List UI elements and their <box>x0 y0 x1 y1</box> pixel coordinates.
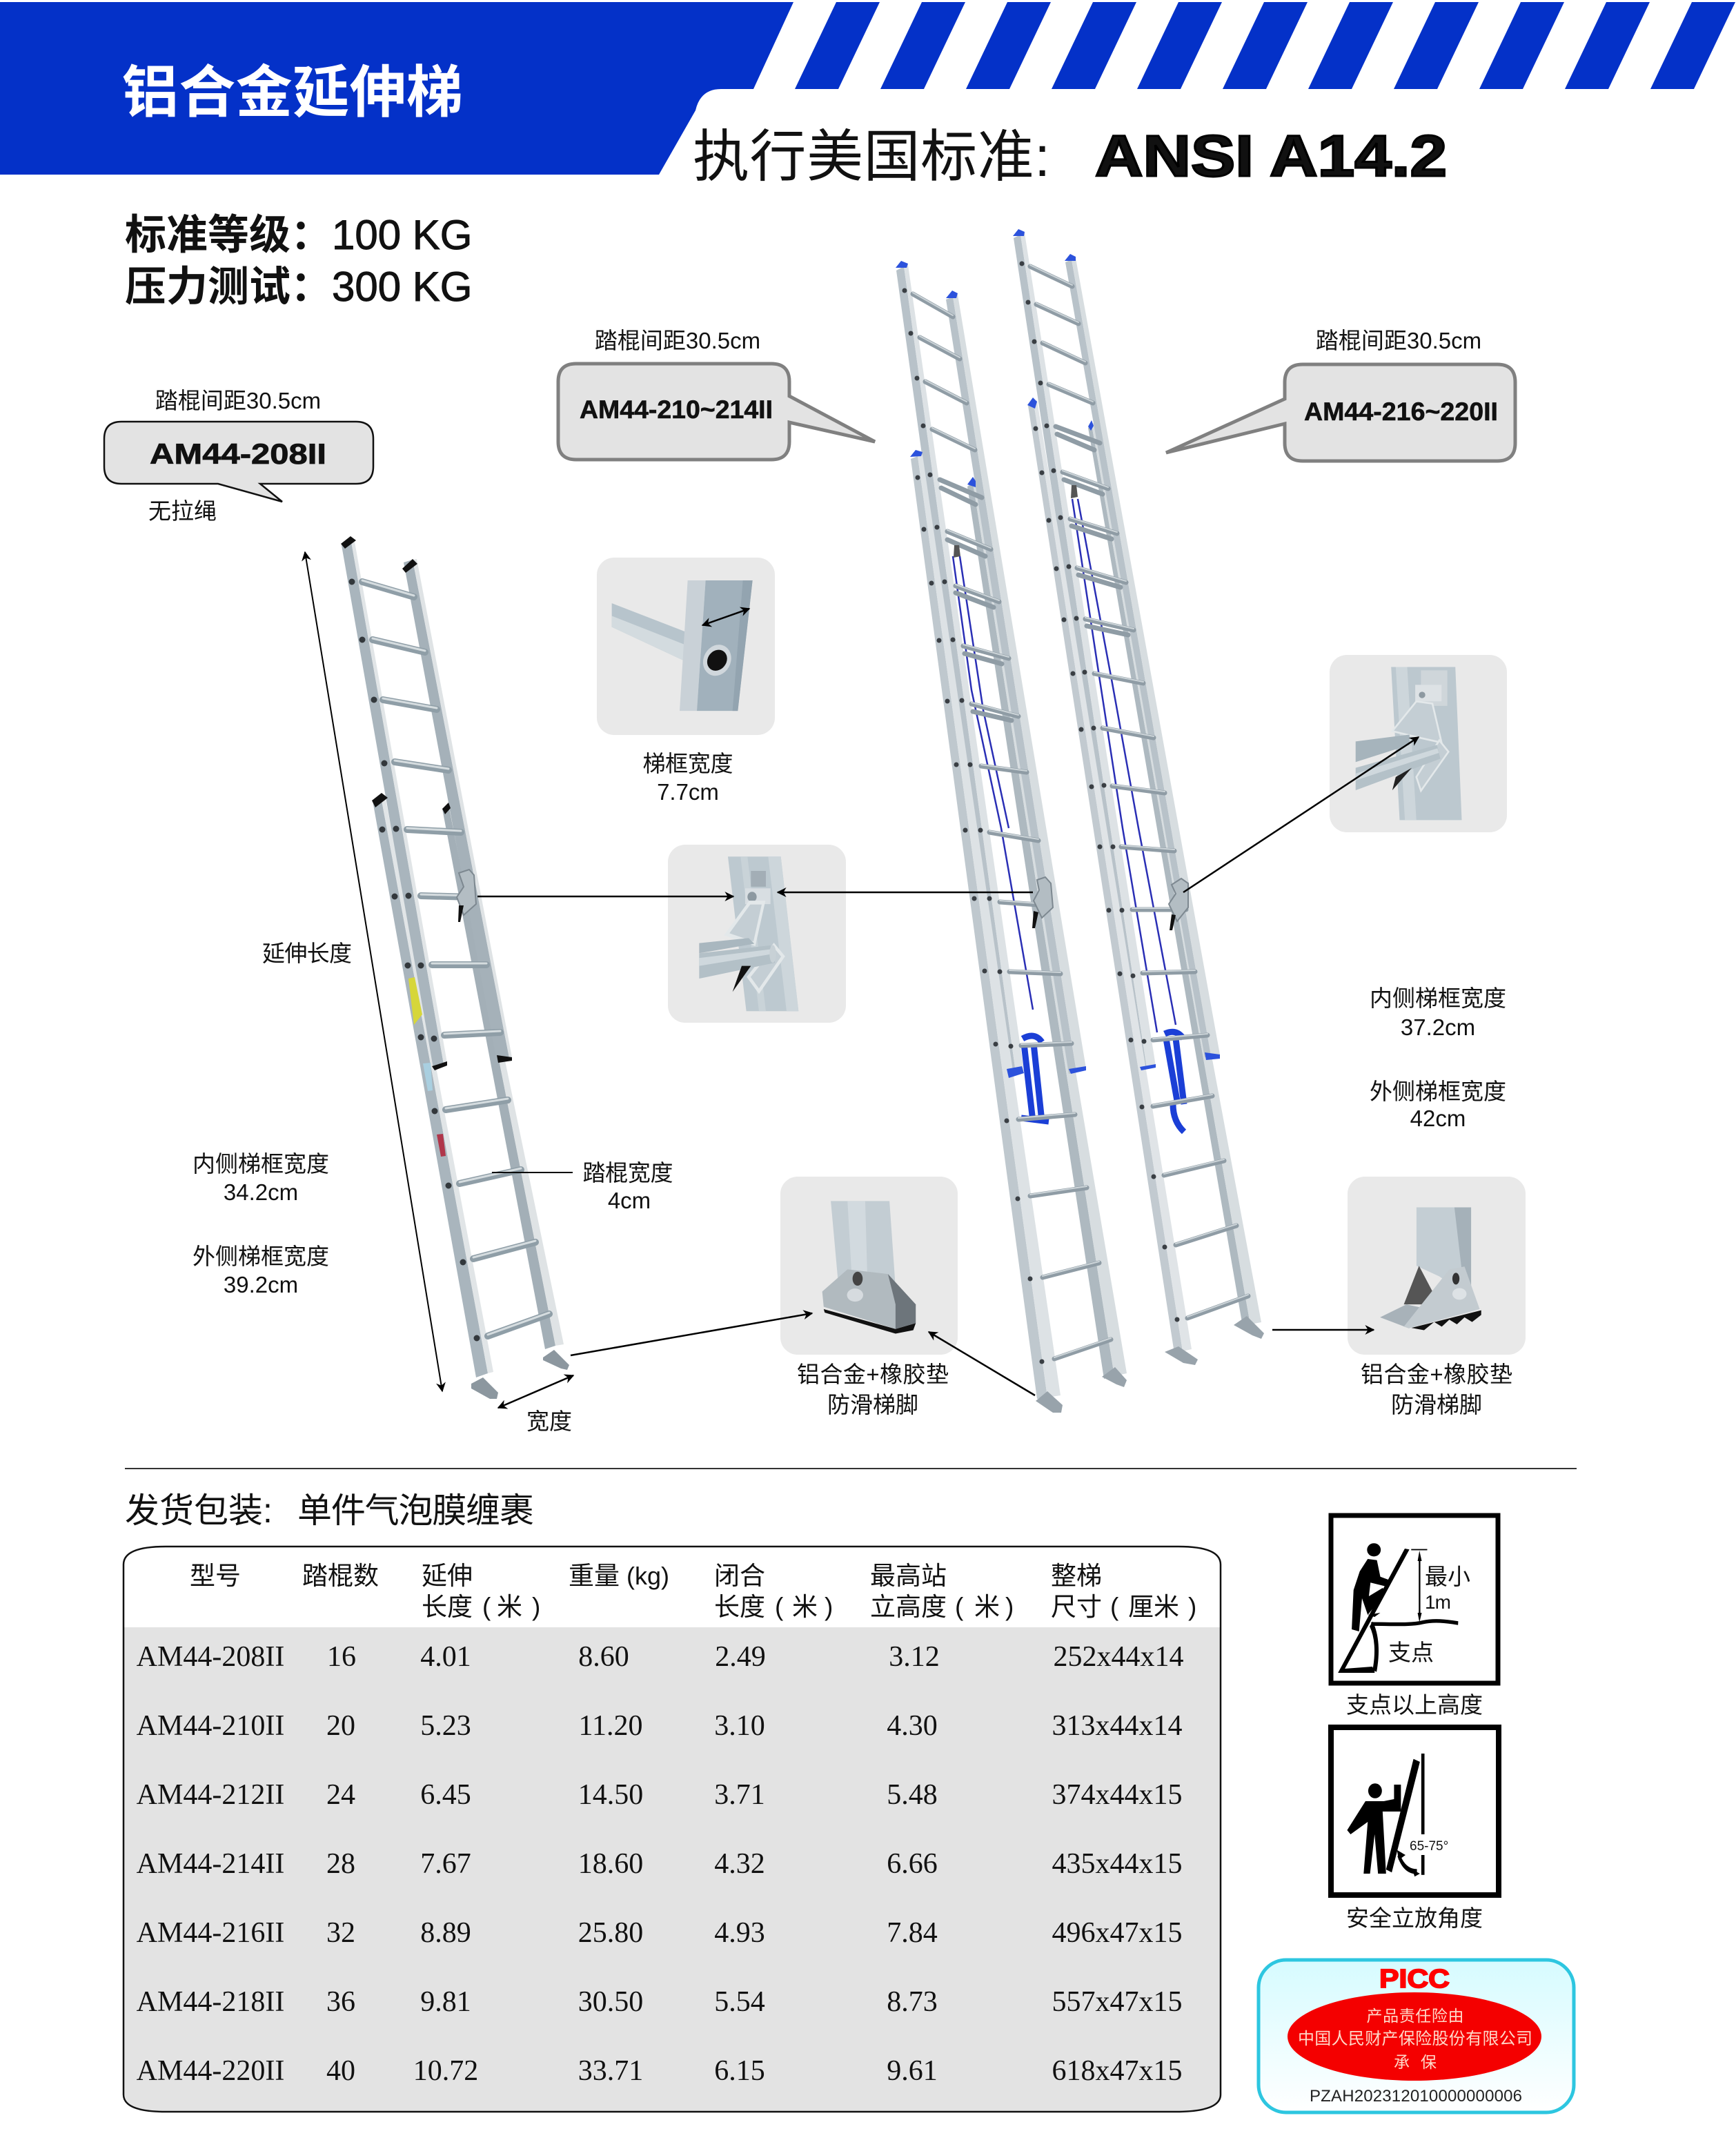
arrow: left ladder foot to photo <box>571 1313 812 1355</box>
table row: AM44-214II: 28 <box>326 1848 355 1880</box>
load rating text: 300 KG <box>332 264 472 310</box>
table header: ) <box>825 1593 833 1621</box>
caption: height above support: 支点以上高度 <box>1346 1692 1483 1718</box>
label: left frame widths <box>193 1151 329 1297</box>
icon: height above support: 最小 <box>1425 1564 1470 1589</box>
table row: AM44-214II: AM44-214II <box>137 1848 284 1880</box>
bolt holes <box>352 582 477 1338</box>
table row: AM44-212II: 374x44x15 <box>1052 1779 1183 1811</box>
caption: left foot: 铝合金+橡胶垫 <box>797 1362 949 1387</box>
table row: AM44-214II: 435x44x15 <box>1052 1848 1183 1880</box>
table row: AM44-220II: AM44-220II <box>137 2055 284 2087</box>
label: rung width with leader <box>492 1160 673 1213</box>
rung lock <box>457 870 476 915</box>
text: rail width: 梯框宽度 <box>643 751 733 776</box>
table row: AM44-216II: 25.80 <box>578 1917 643 1949</box>
label: rung width with leader: 踏棍宽度 <box>582 1160 673 1186</box>
table header: 厘米 <box>1128 1593 1179 1621</box>
spec table <box>124 1547 1221 2112</box>
base section rails <box>442 805 555 1349</box>
table row: AM44-218II: 9.81 <box>420 1986 471 2018</box>
table row: AM44-210II: 20 <box>326 1710 355 1742</box>
table row: AM44-210II: 5.23 <box>420 1710 471 1742</box>
table row: AM44-218II: 30.50 <box>578 1986 643 2018</box>
blue caps and fly feet <box>896 261 1086 1078</box>
standard heading: 执行美国标准: <box>693 126 1050 188</box>
label: width with arrow: 宽度 <box>526 1409 572 1434</box>
label: rung width with leader: 4cm <box>608 1188 651 1213</box>
blue caps and fly feet <box>1013 229 1220 1070</box>
table row: AM44-210II: 313x44x14 <box>1052 1710 1183 1742</box>
table row: AM44-220II: 10.72 <box>413 2055 478 2087</box>
rope straps <box>1165 1032 1184 1132</box>
table row: AM44-220II: 33.71 <box>578 2055 643 2087</box>
table row: AM44-208II: 2.49 <box>715 1641 766 1673</box>
rungs <box>1030 266 1248 1318</box>
label: right frame widths: 内侧梯框宽度 <box>1370 985 1506 1011</box>
caption: left foot <box>797 1362 949 1417</box>
label: right frame widths: 外侧梯框宽度 <box>1370 1079 1506 1104</box>
badge: PICC insurance: PICC <box>1379 1965 1450 1994</box>
table row: AM44-220II: 618x47x15 <box>1052 2055 1183 2087</box>
table row: AM44-208II: 252x44x14 <box>1053 1641 1184 1673</box>
caption: safe angle: 安全立放角度 <box>1346 1905 1483 1931</box>
table row: AM44-212II <box>137 1779 1183 1811</box>
fly section rails <box>404 560 509 1061</box>
labels on rail <box>408 977 422 1025</box>
arrow: lock from middle ladder <box>778 892 1033 893</box>
table header: ) <box>532 1593 540 1621</box>
table header: 长度 <box>714 1593 765 1621</box>
table row: AM44-210II: 3.10 <box>714 1710 765 1742</box>
arrow: middle ladder foot to photo <box>929 1332 1035 1395</box>
caption: left foot: 防滑梯脚 <box>827 1392 918 1417</box>
ladder: AM44-216~220II <box>1013 229 1264 1365</box>
table row: AM44-214II: 6.66 <box>887 1848 938 1880</box>
arrow: lock from left ladder <box>477 896 733 897</box>
table header: 型号 <box>190 1562 241 1590</box>
rungs <box>362 582 549 1336</box>
table row: AM44-208II <box>137 1641 1184 1673</box>
label: right frame widths: 42cm <box>1410 1106 1466 1131</box>
table row: AM44-210II: 11.20 <box>579 1710 642 1742</box>
table row: AM44-214II: 7.67 <box>420 1848 471 1880</box>
rails <box>1088 424 1250 1326</box>
table row: AM44-212II: 14.50 <box>578 1779 643 1811</box>
table header: 延伸 <box>422 1562 473 1590</box>
table row: AM44-216II: 7.84 <box>887 1917 938 1949</box>
icon: height above support <box>1331 1515 1498 1683</box>
table row: AM44-220II: 40 <box>326 2055 355 2087</box>
callout: AM44-216~220II: 踏棍间距30.5cm <box>1316 328 1481 353</box>
label: left frame widths: 内侧梯框宽度 <box>193 1151 329 1177</box>
arrow: right ladder foot to photo <box>1272 1329 1374 1331</box>
title: 铝合金延伸梯 <box>122 61 463 124</box>
callout: AM44-210~214II: 踏棍间距30.5cm <box>595 328 760 353</box>
packaging heading: 单件气泡膜缠裹 <box>297 1491 534 1530</box>
callout: AM44-208II: 踏棍间距30.5cm <box>155 388 321 413</box>
rails <box>967 483 1114 1379</box>
icon: safe standing angle <box>1331 1727 1499 1895</box>
table header: 闭合 <box>714 1562 765 1590</box>
table row: AM44-220II: 9.61 <box>887 2055 938 2087</box>
table row: AM44-212II: 6.45 <box>420 1779 471 1811</box>
standard code: ANSI A14.2 <box>1095 124 1447 188</box>
table header: ( <box>482 1593 491 1621</box>
table header: ( <box>955 1593 964 1621</box>
table row: AM44-218II <box>137 1986 1183 2018</box>
label: left frame widths: 34.2cm <box>224 1179 298 1205</box>
table row: AM44-218II: AM44-218II <box>137 1986 284 2018</box>
ladder: AM44-210~214II <box>896 261 1127 1413</box>
table row: AM44-216II <box>137 1917 1183 1949</box>
arrow: lock from right ladder <box>1183 737 1419 892</box>
rung lock <box>1169 879 1188 921</box>
pulley <box>1071 485 1078 498</box>
table row: AM44-212II: 3.71 <box>714 1779 765 1811</box>
table row: AM44-216II: AM44-216II <box>137 1917 284 1949</box>
callout: AM44-208II: AM44-208II <box>150 438 326 470</box>
table header: 米 <box>497 1593 522 1621</box>
arrow: extension length <box>305 552 442 1391</box>
table row: AM44-216II: 4.93 <box>714 1917 765 1949</box>
panel: rail width photo <box>597 558 775 735</box>
text: rail width: 7.7cm <box>657 779 719 805</box>
label: right frame widths: 37.2cm <box>1401 1014 1475 1040</box>
table row: AM44-208II: 3.12 <box>889 1641 940 1673</box>
panel: rung lock photo <box>668 845 846 1023</box>
table row: AM44-218II: 557x47x15 <box>1052 1986 1183 2018</box>
rope <box>1072 499 1176 1032</box>
load rating text: 100 KG <box>332 212 472 258</box>
table header: 尺寸 <box>1051 1593 1102 1621</box>
feet <box>1165 1316 1264 1365</box>
table header: 最高站 <box>870 1562 947 1590</box>
table row: AM44-216II: 32 <box>326 1917 355 1949</box>
label: right frame widths <box>1370 985 1506 1131</box>
table header: 长度 <box>422 1593 473 1621</box>
table row: AM44-218II: 8.73 <box>887 1986 938 2018</box>
callout: AM44-208II: 无拉绳 <box>148 498 217 524</box>
panel: right foot photo <box>1348 1177 1526 1355</box>
table header: 踏棍数 <box>302 1562 379 1590</box>
load rating text: 压力测试： <box>125 264 332 310</box>
table row: AM44-220II <box>137 2055 1183 2087</box>
ladder: AM44-208II <box>341 536 569 1399</box>
table row: AM44-208II: 4.01 <box>420 1641 471 1673</box>
icon: safe standing angle: 65-75° <box>1410 1839 1448 1854</box>
label: left frame widths: 39.2cm <box>224 1272 298 1297</box>
table header: ) <box>1188 1593 1196 1621</box>
callout: AM44-216~220II: AM44-216~220II <box>1304 398 1498 426</box>
badge: PICC insurance: 中国人民财产保险股份有限公司 <box>1298 2030 1532 2048</box>
table row: AM44-214II: 18.60 <box>578 1848 643 1880</box>
table row: AM44-208II: 8.60 <box>578 1641 629 1673</box>
table row: AM44-214II <box>137 1848 1183 1880</box>
table row: AM44-212II: 5.48 <box>887 1779 938 1811</box>
badge: PICC insurance: 承 保 <box>1394 2053 1437 2071</box>
table header: 立高度 <box>870 1593 947 1621</box>
table header: 整梯 <box>1051 1562 1102 1590</box>
table row: AM44-218II: 5.54 <box>714 1986 765 2018</box>
caps and feet <box>341 536 512 1070</box>
label: extension length: 延伸长度 <box>262 941 352 966</box>
label: left frame widths: 外侧梯框宽度 <box>193 1244 329 1269</box>
table row: AM44-210II: AM44-210II <box>137 1710 284 1742</box>
caption: right foot <box>1361 1362 1512 1417</box>
header: diagonal stripes <box>795 2 1735 89</box>
text: rail width <box>643 751 733 805</box>
table header: 重量 (kg) <box>569 1562 669 1590</box>
rung lock <box>1034 877 1053 918</box>
bolt holes <box>905 291 1042 1362</box>
caption: right foot: 铝合金+橡胶垫 <box>1361 1362 1512 1387</box>
header: blue banner <box>0 2 793 175</box>
callout: AM44-210~214II <box>558 328 875 460</box>
bolt holes <box>1022 264 1177 1319</box>
load rating text <box>125 212 472 310</box>
badge: PICC insurance: PZAH202312010000000006 <box>1310 2087 1522 2106</box>
label: width with arrow <box>498 1375 573 1434</box>
table row: AM44-208II: 16 <box>327 1641 356 1673</box>
table row: AM44-216II: 496x47x15 <box>1052 1917 1183 1949</box>
table header: ) <box>1005 1593 1014 1621</box>
panel: right rung lock photo <box>1330 655 1507 832</box>
table row: AM44-210II <box>137 1710 1183 1742</box>
packaging heading: 发货包装: <box>125 1491 273 1530</box>
panel: left foot photo <box>780 1177 958 1355</box>
table row: AM44-208II: AM44-208II <box>137 1641 284 1673</box>
icon: height above support: 1m <box>1425 1591 1451 1613</box>
table header: 米 <box>792 1593 818 1621</box>
table row: AM44-210II: 4.30 <box>887 1710 938 1742</box>
feet <box>1036 1367 1127 1413</box>
rungs <box>913 294 1111 1359</box>
badge: PICC insurance <box>1259 1960 1574 2112</box>
callout: AM44-208II <box>104 388 373 524</box>
caption: right foot: 防滑梯脚 <box>1391 1392 1482 1417</box>
callout: AM44-216~220II <box>1166 328 1515 461</box>
table row: AM44-214II: 4.32 <box>714 1848 765 1880</box>
table header <box>190 1562 1196 1621</box>
table header: ( <box>1110 1593 1119 1621</box>
table row: AM44-216II: 8.89 <box>420 1917 471 1949</box>
pulley <box>954 545 960 558</box>
table row: AM44-212II: AM44-212II <box>137 1779 284 1811</box>
table header: 米 <box>974 1593 1000 1621</box>
table row: AM44-220II: 6.15 <box>714 2055 765 2087</box>
callout: AM44-210~214II: AM44-210~214II <box>580 395 773 424</box>
icon: height above support: 支点 <box>1388 1640 1434 1665</box>
load rating text: 标准等级： <box>125 212 332 258</box>
table row: AM44-218II: 36 <box>326 1986 355 2018</box>
badge: PICC insurance: 产品责任险由 <box>1366 2007 1464 2025</box>
table row: AM44-212II: 24 <box>326 1779 355 1811</box>
rope <box>953 556 1033 1010</box>
rope straps <box>1021 1036 1049 1121</box>
table header: ( <box>775 1593 784 1621</box>
